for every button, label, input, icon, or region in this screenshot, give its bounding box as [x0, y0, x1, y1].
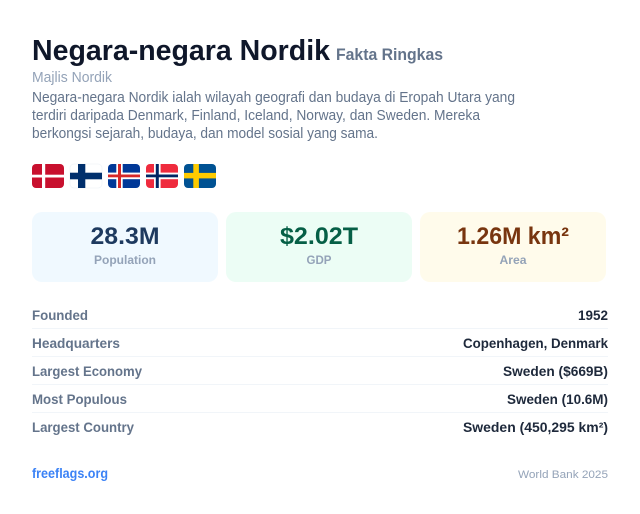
row: headquarters: Headquarters — [32, 336, 120, 351]
stat card: GDP: GDP — [306, 253, 332, 267]
row: most populous — [32, 392, 608, 407]
stat card: population: Population — [94, 253, 156, 267]
subtitle: Fakta Ringkas — [336, 46, 443, 64]
row: most populous: Sweden (10.6M) — [507, 392, 608, 407]
title: Negara-negara Nordik — [32, 35, 330, 67]
row: headquarters: Copenhagen, Denmark — [463, 336, 609, 351]
description text: berkongsi sejarah, budaya, dan model sosial yang sama. — [32, 126, 378, 142]
flag: Denmark — [32, 164, 64, 188]
stat card: GDP — [226, 212, 412, 282]
row: founded: 1952 — [578, 308, 608, 323]
stat card: area — [420, 212, 606, 282]
row: founded — [32, 308, 608, 323]
flag: Norway — [146, 164, 178, 188]
row: founded: Founded — [32, 308, 88, 323]
flag: Sweden — [184, 164, 216, 188]
row: headquarters — [32, 336, 609, 351]
description text — [32, 90, 515, 142]
row: largest economy: Sweden ($669B) — [503, 364, 608, 379]
description text: Negara-negara Nordik ialah wilayah geografi dan budaya di Eropah Utara yang — [32, 90, 515, 106]
stat card: area: 1.26M km² — [457, 223, 569, 250]
row: largest economy: Largest Economy — [32, 364, 143, 379]
stat card: GDP: $2.02T — [280, 223, 358, 250]
footer source: World Bank 2025 — [518, 469, 608, 481]
row: largest country: Sweden (450,295 km²) — [463, 420, 608, 435]
row: largest country — [32, 420, 608, 435]
stat card: population: 28.3M — [90, 223, 160, 250]
stat card: area: Area — [500, 253, 527, 267]
flag: Finland — [70, 164, 102, 188]
description text: terdiri daripada Denmark, Finland, Iceland, Norway, dan Sweden. Mereka — [32, 108, 480, 124]
row: largest economy — [32, 364, 608, 379]
footer link: freeflags.org — [32, 466, 108, 481]
row: largest country: Largest Country — [32, 420, 135, 435]
stat card: population — [32, 212, 218, 282]
row: most populous: Most Populous — [32, 392, 127, 407]
organisation name: Majlis Nordik — [32, 70, 113, 86]
flag: Iceland — [108, 164, 140, 188]
flags row — [32, 164, 216, 188]
